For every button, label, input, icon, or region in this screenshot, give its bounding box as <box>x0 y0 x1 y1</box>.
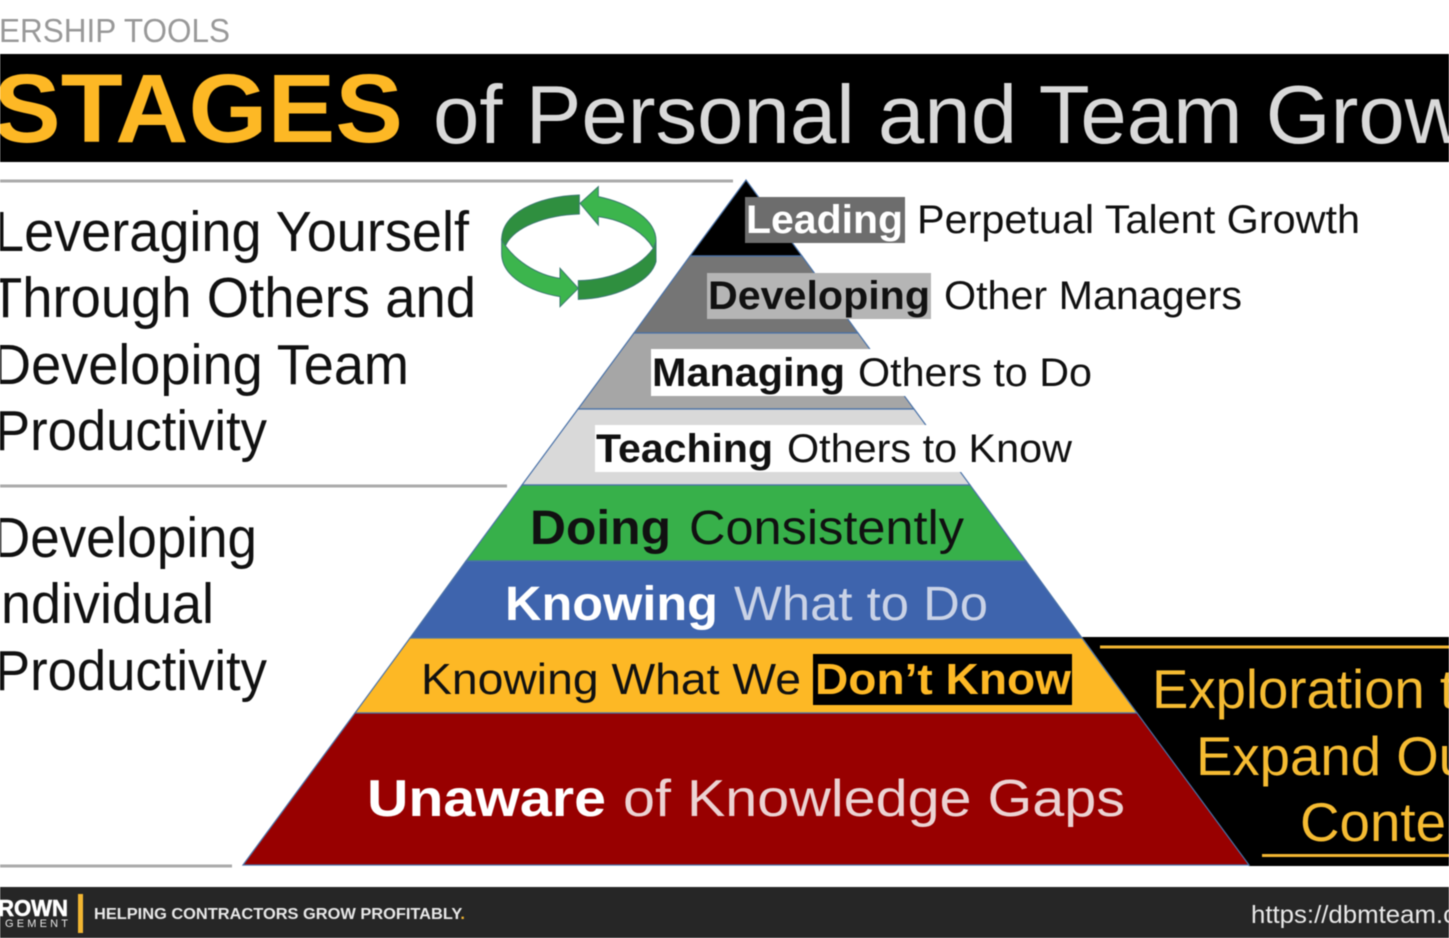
layer: doing <box>466 485 1026 561</box>
label: teaching <box>595 425 1075 472</box>
label: managing: Others to Do <box>858 351 1092 395</box>
layer: unaware <box>243 713 1249 865</box>
label: leading <box>745 197 1365 243</box>
footer bar <box>0 887 1449 938</box>
label: knowing what to do: What to Do <box>734 578 988 631</box>
pyramid <box>243 180 1249 865</box>
footer tagline: HELPING CONTRACTORS GROW PROFITABLY . <box>94 906 465 923</box>
label: knowing what to do <box>505 578 988 631</box>
label: unaware of knowledge gaps: Unaware <box>367 770 606 828</box>
label: managing <box>651 349 1096 396</box>
exploration text: Conte <box>1300 791 1446 853</box>
left text: team productivity <box>0 200 476 463</box>
label: teaching: Others to Know <box>787 427 1072 471</box>
footer logo: ROWN <box>0 895 68 921</box>
label: leading: Leading <box>746 198 903 242</box>
layer: knowing <box>410 561 1082 638</box>
label: unaware of knowledge gaps: of Knowledge Gaps <box>623 770 1125 828</box>
label: leading: Perpetual Talent Growth <box>917 198 1360 242</box>
label: unaware of knowledge gaps <box>367 770 1125 828</box>
left text: individual productivity: Productivity <box>0 639 267 703</box>
label: knowing what we don't know: Don’t Know <box>815 655 1072 704</box>
label: knowing what we don't know <box>421 654 1072 705</box>
footer logo <box>0 894 83 933</box>
label: teaching: Teaching <box>596 427 773 471</box>
title banner <box>0 54 1449 163</box>
layer: developing <box>634 256 858 333</box>
left text: individual productivity: ndividual <box>1 572 214 636</box>
title highlight word: STAGES <box>0 54 403 163</box>
label: doing consistently: Doing <box>530 502 671 555</box>
label: developing <box>707 273 1246 319</box>
layer: teaching <box>522 409 970 485</box>
footer logo: GEMENT <box>5 918 68 930</box>
layer: managing <box>578 333 914 409</box>
left text: individual productivity: Developing <box>0 506 257 570</box>
title remainder: of Personal and Team Grow <box>433 68 1449 161</box>
left text: team productivity: Leveraging Yourself <box>0 200 469 264</box>
layer: knowing what we don't know <box>355 638 1137 713</box>
left text: individual productivity <box>0 506 267 703</box>
label: doing consistently: Consistently <box>689 502 964 555</box>
layer: leading <box>690 180 802 256</box>
label: managing: Managing <box>652 351 845 395</box>
left text: team productivity: Developing Team <box>0 333 409 397</box>
label: doing consistently <box>530 502 964 555</box>
exploration text <box>1152 658 1449 853</box>
left text: team productivity: Through Others and <box>0 266 476 330</box>
left text: team productivity: Productivity <box>0 399 267 463</box>
label: knowing what to do: Knowing <box>505 578 718 631</box>
label: developing: Other Managers <box>944 274 1242 318</box>
label: knowing what we don't know: Knowing What We <box>421 655 801 704</box>
section label: ERSHIP TOOLS <box>0 12 230 49</box>
exploration text: Exploration t <box>1152 658 1449 720</box>
black exploration panel <box>1082 637 1449 866</box>
label: developing: Developing <box>708 274 930 318</box>
footer url: https://dbmteam.c <box>1251 901 1449 929</box>
icon: green cycle arrows <box>502 187 656 307</box>
